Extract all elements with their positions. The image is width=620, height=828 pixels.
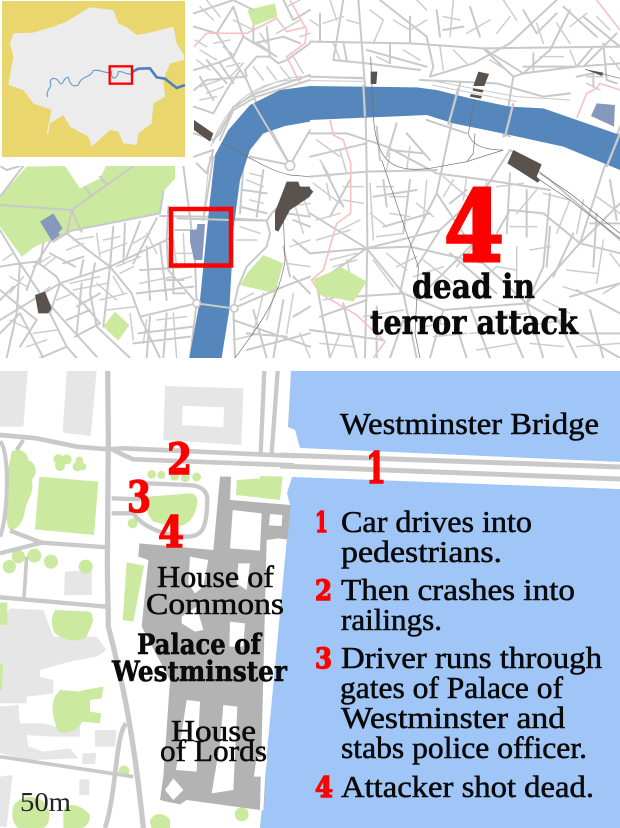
park bbox=[313, 267, 367, 302]
light grey buildings bbox=[0, 371, 243, 827]
step 1 bbox=[315, 504, 532, 569]
inset locator box bbox=[110, 66, 132, 84]
panel: central London map bbox=[0, 0, 620, 358]
boundary lines bbox=[312, 0, 620, 358]
step 3: 3 bbox=[315, 642, 332, 675]
minor streets, left half bbox=[3, 0, 310, 358]
inset river Thames bbox=[47, 68, 184, 97]
Greater London shape bbox=[8, 7, 184, 147]
inset background bbox=[2, 1, 185, 157]
map marker 4: 4 bbox=[158, 508, 184, 558]
step 2: Then crashes into bbox=[341, 572, 575, 607]
headline line 2: terror attack bbox=[370, 303, 579, 343]
railway tracks by river bbox=[310, 77, 570, 102]
river bbox=[260, 371, 620, 828]
step 3 bbox=[315, 640, 603, 765]
scale label: 50m bbox=[20, 787, 71, 817]
roundabouts bbox=[193, 161, 295, 312]
blue-grey buildings bbox=[40, 213, 205, 260]
label: House of Lords: of Lords bbox=[160, 733, 267, 768]
map right half bbox=[308, 0, 620, 358]
label: Westminster Bridge: Westminster Bridge bbox=[340, 406, 599, 441]
courtyards bbox=[165, 510, 282, 800]
label: House of Commons: House of bbox=[157, 559, 275, 594]
river Thames bbox=[308, 86, 620, 170]
minor streets, right half bbox=[310, 0, 620, 358]
roads bbox=[0, 371, 310, 828]
step 3: stabs police officer. bbox=[341, 730, 587, 765]
step 2: 2 bbox=[315, 574, 332, 607]
blue-grey building bbox=[591, 103, 615, 127]
panel: Greater London locator inset bbox=[0, 0, 193, 166]
label: House of Commons bbox=[146, 559, 284, 621]
dark station buildings bbox=[35, 120, 310, 313]
label: House of Lords bbox=[160, 713, 267, 768]
label: Palace of Westminster: Palace of bbox=[137, 628, 263, 661]
white separator bbox=[0, 358, 620, 371]
Westminster Bridge bbox=[280, 448, 620, 489]
rail lines bbox=[222, 143, 310, 358]
headline: 4 dead in terror attack bbox=[370, 170, 579, 343]
step 3: Westminster and bbox=[341, 700, 566, 735]
Westminster Bridge, west bbox=[177, 103, 290, 308]
step 3: Driver runs through bbox=[341, 640, 603, 675]
map marker 1: 1 bbox=[366, 444, 386, 494]
boundary lines bbox=[194, 0, 307, 83]
label: House of Lords: House bbox=[171, 713, 256, 748]
label: Palace of Westminster bbox=[111, 628, 288, 688]
big number: 4 bbox=[444, 170, 504, 285]
step 4: 4 bbox=[315, 771, 333, 804]
river Thames bbox=[189, 86, 310, 358]
inset white surround bbox=[0, 0, 193, 166]
panel: Westminster detail map bbox=[0, 371, 620, 828]
step 2 bbox=[315, 572, 575, 637]
embankment lines bbox=[203, 76, 302, 217]
map left half bbox=[0, 0, 310, 358]
label: Palace of Westminster: Westminster bbox=[111, 655, 288, 688]
step 1: 1 bbox=[315, 506, 328, 539]
label: House of Commons: Commons bbox=[146, 586, 284, 621]
step 1: Car drives into bbox=[341, 504, 532, 539]
map marker 3: 3 bbox=[127, 473, 151, 523]
step 1: pedestrians. bbox=[341, 534, 502, 569]
locator box on central map bbox=[171, 209, 231, 266]
headline line 1: dead in bbox=[412, 267, 535, 307]
timeline list bbox=[315, 504, 603, 804]
rail lines bbox=[371, 57, 620, 358]
Palace of Westminster building bbox=[138, 477, 291, 811]
dark station buildings bbox=[310, 69, 603, 196]
step 3: gates of Palace of bbox=[340, 670, 564, 705]
green trees and lawns bbox=[0, 450, 283, 828]
parks bbox=[0, 3, 283, 341]
map marker 2: 2 bbox=[167, 435, 192, 485]
road network west bbox=[0, 166, 267, 358]
step 4: Attacker shot dead. bbox=[341, 769, 594, 804]
step 2: railings. bbox=[341, 602, 442, 637]
road network north-centre bbox=[194, 0, 310, 358]
river bridges bbox=[363, 85, 620, 167]
